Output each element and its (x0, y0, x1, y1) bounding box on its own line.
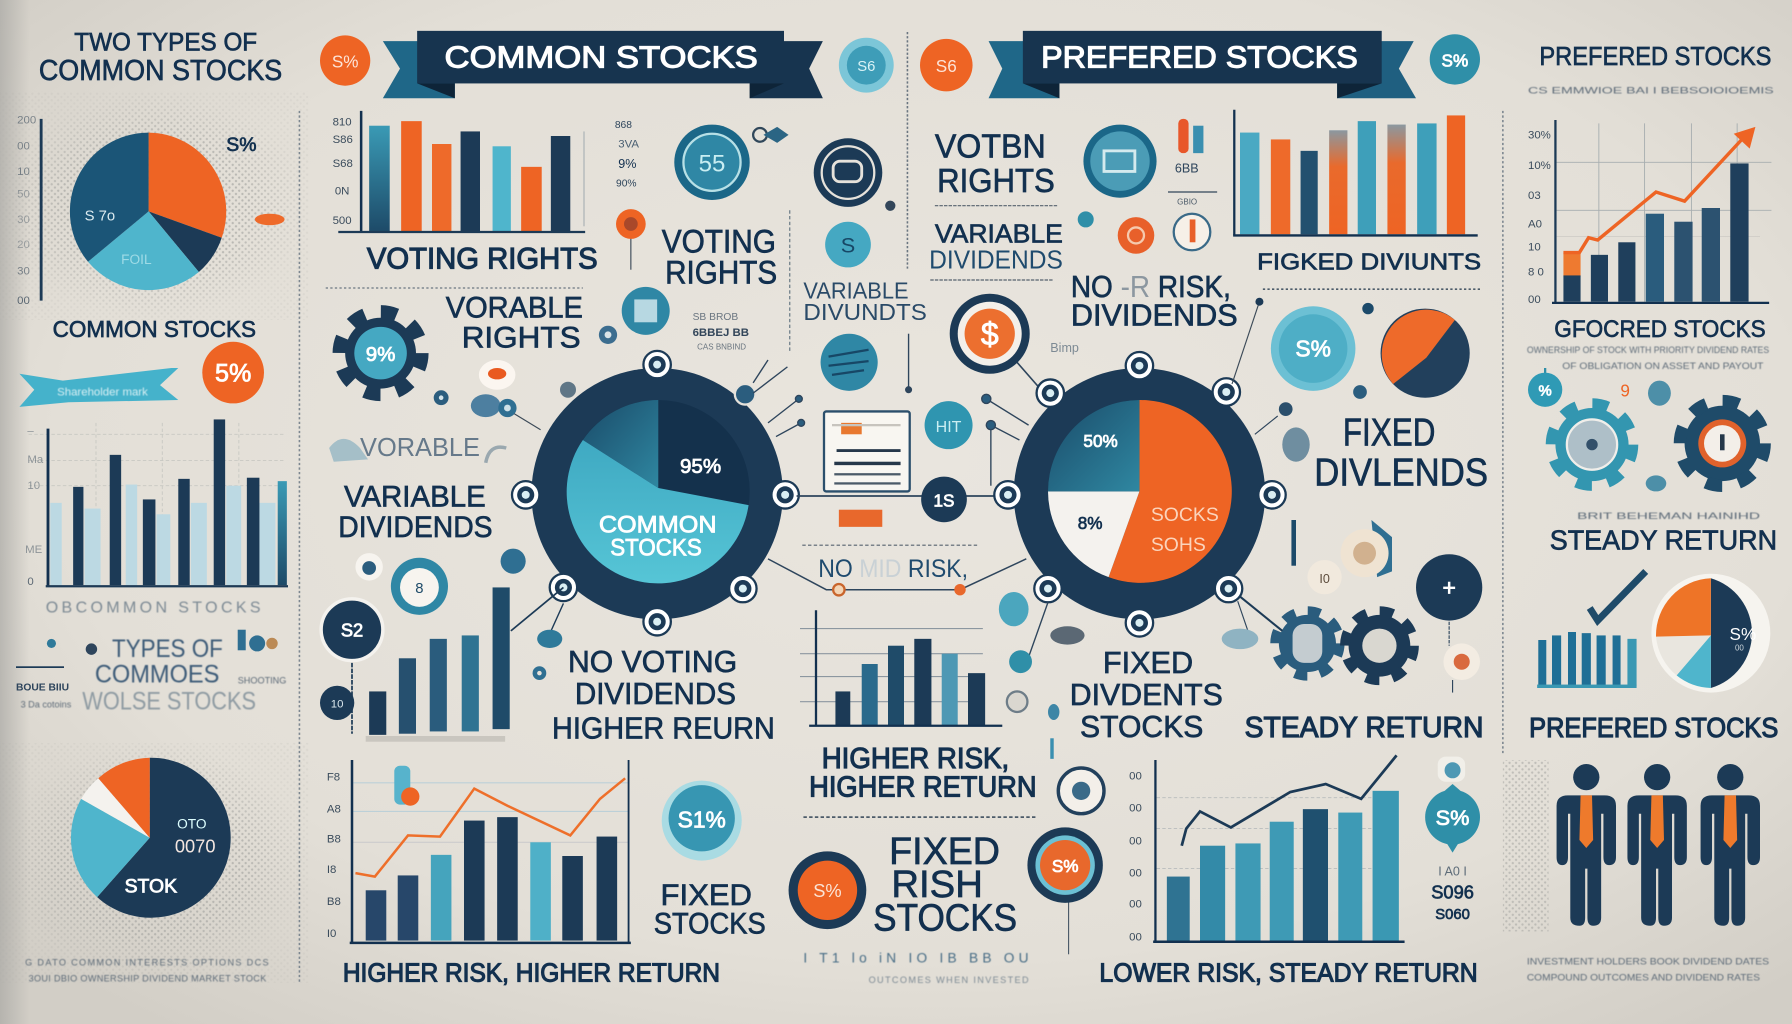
ring chart: prefered stocks (994, 352, 1286, 637)
small blob and fine print (1577, 475, 1761, 521)
panel: prefered stocks centre (920, 31, 1488, 988)
icons: mid column top: CAS BNBIND (697, 343, 746, 352)
badge: teal percent large: S% (1295, 336, 1331, 362)
bar chart: common stocks: ME (25, 544, 43, 556)
icons: coins and gears: + (1442, 574, 1456, 600)
combo chart: lower risk: 00 (1129, 932, 1142, 944)
smudged label: vorable: VORABLE (360, 432, 480, 462)
bar chart: voting rights (333, 111, 585, 232)
bar chart: common stocks: Ma (27, 454, 44, 466)
label: no voting dividends higher return: NO VOTING (568, 644, 737, 679)
chart: rising line and bars: A0 (1528, 218, 1542, 230)
pie chart: common stocks split: 200 (17, 114, 36, 126)
label: fixed risk stocks: FIXED (889, 830, 1000, 872)
icon: three business people (1557, 764, 1760, 926)
label: no voting dividends higher return (552, 644, 775, 745)
label: variable dividends: VARIABLE (935, 218, 1063, 248)
ring chart: common stocks: COMMON (599, 512, 717, 539)
badge: teal percent (662, 781, 742, 861)
pie chart: common stocks split: 50 (17, 189, 30, 201)
bar chart: voting rights: S86 (333, 134, 353, 146)
ribbon: teal banner: Shareholder mark (57, 386, 148, 398)
icon: document card (824, 411, 910, 491)
label: fixed dividents stocks: FIXED (1103, 645, 1193, 680)
fine print bottom left: G DATO COMMON INTERESTS OPTIONS DCS (25, 958, 269, 968)
heading: two types of common stocks (39, 28, 282, 87)
bar chart: higher risk centre (800, 610, 1002, 726)
label: fixed diviunts: FIGKED DIVIUNTS (1257, 249, 1481, 275)
label: variable dividends: DIVIDENDS (338, 511, 493, 544)
badge: light teal percent: S6 (857, 59, 875, 75)
label: prefered stocks: PREFERED STOCKS (1529, 712, 1778, 743)
halftone strip (1503, 760, 1549, 931)
badge: teal pin percent (1425, 784, 1480, 853)
icons: prefered top: 6BB (1175, 162, 1199, 176)
label: voten rights: VOTBN (935, 129, 1046, 166)
pie chart: common stocks split: S 7o (85, 209, 115, 225)
icons: small connector pieces (434, 360, 541, 430)
pie chart: stock split: OTO (177, 817, 207, 832)
badge: teal pin percent: S% (1436, 805, 1469, 830)
combo chart: higher risk: A8 (327, 804, 341, 816)
badge: 5 percent (202, 342, 264, 403)
smudged heading: types of common stocks: SHOOTING (238, 675, 286, 685)
pie chart: common stocks split: S% (226, 134, 256, 156)
icons: lower centre connectors (999, 592, 1104, 814)
label: voting rights second: RIGHTS (665, 254, 777, 290)
badge: 5 percent: 5% (215, 360, 251, 388)
icon: check mark (1590, 571, 1646, 621)
smudged heading: types of common stocks: COMMOES (95, 660, 219, 688)
fine print centre: I T1 lo iN IO IB BB OU (803, 950, 1029, 965)
chart: rising line and bars: 03 (1528, 190, 1541, 202)
chart: rising line and bars: 10% (1528, 160, 1551, 172)
bar chart: common stocks: 0 (27, 576, 34, 588)
label: vorable rights: VORABLE (446, 292, 583, 325)
pie chart with percent (1651, 574, 1770, 693)
subheading fine print: CS EMMWIOE BAI I BEBSOIOIOEMIS (1528, 86, 1774, 96)
pie chart: stock split: STOK (125, 876, 177, 898)
icon: gear with percent: 9% (366, 343, 395, 366)
label: steady return: STEADY RETURN (1245, 712, 1483, 744)
icons: mid column top: 9% (618, 157, 636, 171)
label: voting rights second (662, 224, 777, 290)
smudged heading: types of common stocks: 3 Da cotoins (21, 699, 72, 709)
label: no risk dividends: DIVIDENDS (1071, 298, 1238, 333)
vertical divider (1502, 111, 1504, 754)
smudged heading: types of common stocks: WOLSE STOCKS (82, 688, 256, 716)
icons: growth chart callouts (320, 549, 563, 720)
bar chart: growth (352, 587, 510, 742)
bar chart: voting rights: 0N (335, 185, 349, 197)
label: fixed dividends large: FIXED (1343, 412, 1435, 455)
fine print bottom right (1527, 957, 1769, 983)
combo chart: higher risk: I0 (327, 928, 336, 940)
label: no risk dividends (1050, 269, 1238, 355)
label: vorable rights (446, 292, 583, 354)
no risk connector (768, 545, 1026, 595)
icon: lock (1438, 757, 1465, 782)
icons: prefered top: GBIO (1177, 198, 1197, 207)
stat stack: I A0 I (1438, 864, 1467, 878)
icons: mid column top (599, 120, 973, 449)
halftone backdrop bottom (0, 743, 309, 983)
combo chart: higher risk: B8 (327, 896, 341, 908)
icon: dark badge (921, 477, 967, 522)
badge: orange percent (920, 39, 973, 91)
fine print: OWNERSHIP OF STOCK WITH PRIORITY DIVIDEND RATES (1527, 345, 1769, 355)
dotted rule (1263, 288, 1480, 290)
label: fixed stocks: FIXED (661, 879, 752, 912)
pie chart: stock split: 0070 (175, 836, 215, 857)
bar chart: voting rights: S68 (333, 158, 353, 170)
icons: growth chart callouts: 8 (415, 581, 424, 597)
ring chart: common stocks: STOCKS (610, 534, 702, 561)
icons: mid column top: 90% (616, 178, 637, 189)
small icons row: 9 (1620, 381, 1630, 401)
fine print bottom left: 3OUI DBIO OWNERSHIP DIVIDEND MARKET STOCK (29, 974, 266, 984)
label: lower risk, steady return: LOWER RISK, STEADY RETURN (1099, 958, 1478, 988)
smudged heading: types of common stocks: BOUE BIIU (16, 682, 69, 693)
label: fixed stocks (654, 879, 766, 941)
rule under left chart (326, 287, 583, 289)
connector lines centre (753, 32, 1029, 496)
fine print centre (803, 950, 1029, 985)
panel: common stocks centre (320, 31, 1103, 988)
pie chart: orange and navy (1353, 309, 1470, 399)
label: vorable rights: RIGHTS (462, 321, 581, 354)
smudged heading: types of common stocks (16, 630, 286, 716)
badge: orange ring percent left: S% (813, 880, 842, 901)
icon: dollar badge (950, 294, 1040, 389)
mini bar chart (1537, 632, 1637, 688)
small icons row (1528, 368, 1671, 407)
halftone backdrop top (0, 91, 309, 320)
badge: light teal percent (839, 38, 894, 93)
combo chart: higher risk: F8 (327, 772, 340, 784)
chart: rising line and bars: 30% (1528, 129, 1551, 141)
icons: mid column top: 3VA (618, 138, 639, 150)
combo chart: lower risk: 00 (1129, 836, 1142, 848)
label: no voting dividends higher return: DIVIDENDS (575, 676, 736, 711)
chart: rising line and bars: 00 (1528, 294, 1541, 306)
bar chart: voting rights: 810 (333, 117, 352, 129)
small blob and fine print: BRIT BEHEMAN HAINIHD (1577, 511, 1761, 521)
label: variable divunts: VARIABLE (803, 277, 909, 303)
chart: rising line and bars: 10 (1528, 241, 1541, 253)
icons: mid column top: S (841, 233, 855, 258)
label: variable dividends (929, 206, 1063, 280)
combo chart: lower risk: 00 (1129, 898, 1142, 910)
icon: orange tag (839, 510, 882, 527)
pie chart with percent: S% (1730, 624, 1756, 644)
combo chart: lower risk: 00 (1129, 770, 1142, 782)
pie chart: common stocks split: FOIL (121, 252, 152, 267)
fine print (1527, 345, 1769, 371)
combo chart: lower risk: 00 (1129, 802, 1142, 814)
label: variable dividends: DIVIDENDS (929, 245, 1063, 275)
badge: teal percent large (1232, 298, 1374, 391)
pie chart: common stocks split: 00 (17, 141, 30, 153)
badge: orange ring percent right (1027, 827, 1103, 954)
label: voten rights (935, 129, 1055, 200)
label: steady return: STEADY RETURN (1550, 525, 1777, 556)
label: gfocred stocks: GFOCRED STOCKS (1554, 316, 1766, 343)
badge: teal percent (1430, 34, 1480, 85)
heading: prefered stocks: PREFERED STOCKS (1539, 41, 1771, 71)
bar chart: common stocks (25, 419, 288, 588)
combo chart: higher risk: B8 (327, 833, 341, 845)
ribbon: common stocks (383, 31, 823, 98)
ring chart: prefered stocks: 50% (1083, 431, 1118, 451)
pie chart: common stocks split: 10 (17, 166, 30, 178)
label: variable divunts (803, 277, 927, 325)
label: fixed risk stocks: STOCKS (873, 896, 1017, 938)
fine print centre: OUTCOMES WHEN INVESTED (869, 975, 1029, 985)
combo chart: higher risk (327, 760, 631, 943)
smudged heading: types of common stocks: TYPES OF (112, 635, 223, 663)
badge: teal percent: S% (1442, 50, 1468, 70)
label: no voting dividends higher return: HIGHER REURN (552, 710, 775, 745)
small icons row: % (1539, 383, 1552, 399)
pie chart: common stocks split: 30 (17, 214, 30, 226)
icon: navy gear (1680, 401, 1765, 486)
combo chart: lower risk (1129, 755, 1405, 944)
icons: mid column top: 55 (699, 150, 725, 177)
label: voting rights: VOTING RIGHTS (367, 243, 598, 276)
bar chart: voting rights: 500 (333, 215, 352, 227)
pie chart: common stocks split (17, 114, 285, 307)
stat stack: S060 (1435, 907, 1470, 923)
dotted rule (803, 816, 1038, 818)
combo chart: lower risk: 00 (1129, 868, 1142, 880)
combo chart: higher risk: I8 (327, 864, 336, 876)
fine print: OF OBLIGATION ON ASSET AND PAYOUT (1562, 361, 1764, 371)
label: higher risk, higher return centre: HIGHER RETURN (809, 772, 1037, 804)
label: variable dividends (338, 480, 493, 544)
label: fixed dividends large: DIVLENDS (1314, 452, 1488, 495)
bar chart: fixed dividends (1233, 110, 1478, 235)
caption: common stocks: OBCOMMON STOCKS (46, 600, 261, 617)
icons: mid column top: 868 (615, 120, 632, 131)
ring chart: common stocks: 95% (680, 455, 721, 478)
label: common stocks: COMMON STOCKS (53, 316, 256, 342)
label: variable divunts: DIVUNDTS (803, 299, 927, 325)
bar chart: common stocks: – (27, 425, 34, 437)
icon: dollar badge: $ (981, 316, 999, 352)
badge: orange percent: S6 (936, 56, 957, 76)
label: fixed stocks: STOCKS (654, 908, 766, 941)
stat stack (1431, 864, 1474, 923)
badge: orange percent: S% (332, 51, 358, 71)
pie chart: common stocks split: 20 (17, 239, 30, 251)
no risk connector: NO MID RISK, (818, 555, 968, 583)
label: fixed risk stocks (873, 830, 1017, 938)
badge: teal percent: S1% (678, 806, 726, 832)
fine print bottom right: INVESTMENT HOLDERS BOOK DIVIDEND DATES (1527, 957, 1769, 967)
ribbon: prefered stocks: PREFERED STOCKS (1041, 39, 1358, 74)
ribbon: prefered stocks (989, 31, 1416, 98)
label: higher risk, higher return centre (809, 743, 1037, 804)
icons: mid column top: SB BROB (693, 312, 738, 323)
heading: two types of common stocks: TWO TYPES OF (74, 28, 257, 56)
bar chart: common stocks: 10 (27, 480, 40, 492)
pie chart: stock split (71, 758, 231, 918)
icon: gear with percent (339, 312, 422, 394)
ring chart: common stocks (512, 351, 799, 635)
icon: teal gear (1552, 405, 1632, 485)
icons: coins and gears (1222, 402, 1482, 693)
vertical divider (298, 111, 300, 983)
stat stack: S096 (1431, 881, 1474, 902)
ribbon: teal banner (19, 368, 178, 407)
label: fixed dividends large (1314, 412, 1488, 495)
badge: orange ring percent right: S% (1052, 856, 1078, 876)
label: voten rights: RIGHTS (937, 163, 1055, 200)
label: variable dividends: VARIABLE (344, 480, 486, 513)
ring chart: prefered stocks: 8% (1078, 513, 1102, 533)
heading: two types of common stocks: COMMON STOCKS (39, 55, 282, 87)
panel: right column, prefered stocks (1503, 41, 1778, 983)
icons: mid column top: 6BBEJ BB (693, 327, 749, 339)
label: higher risk, higher return centre: HIGHER RISK, (822, 743, 1009, 775)
smudged label: vorable (329, 432, 506, 463)
pie chart: common stocks split: 00 (17, 295, 30, 307)
label: no risk dividends: Bimp (1050, 341, 1079, 355)
icon: dark badge: 1S (934, 490, 954, 510)
chart: rising line and bars (1528, 120, 1771, 306)
icons: growth chart callouts: S2 (341, 620, 363, 641)
pie chart: common stocks split: 30 (17, 265, 30, 277)
label: no risk dividends: NO -R RISK, (1071, 269, 1231, 304)
label: higher risk, higher return: HIGHER RISK, HIGHER RETURN (343, 958, 720, 988)
label: fixed dividents stocks: STOCKS (1080, 709, 1203, 744)
chart: rising line and bars: 8 0 (1528, 266, 1544, 278)
label: voting rights second: VOTING (662, 224, 776, 260)
fine print bottom right: COMPOUND OUTCOMES AND DIVIDEND RATES (1527, 973, 1760, 983)
icons: coins and gears: I0 (1319, 572, 1330, 586)
ribbon: common stocks: COMMON STOCKS (445, 39, 758, 74)
label: fixed dividents stocks (1070, 645, 1223, 744)
badge: orange percent (320, 35, 370, 86)
ring chart: prefered stocks: SOCKS (1151, 504, 1219, 526)
label: fixed risk stocks: RISH (891, 863, 983, 905)
label: fixed dividents stocks: DIVDENTS (1070, 677, 1223, 712)
pie chart with percent: 00 (1735, 643, 1744, 652)
badge: orange ring percent left (789, 851, 866, 929)
icons: mid column top: HIT (936, 419, 962, 436)
icons: prefered top (1078, 119, 1217, 254)
fine print bottom left (25, 958, 269, 984)
ring chart: prefered stocks: SOHS (1151, 534, 1206, 556)
panel: left column, two types of common stocks (0, 28, 309, 984)
icons: growth chart callouts: 10 (331, 698, 343, 710)
